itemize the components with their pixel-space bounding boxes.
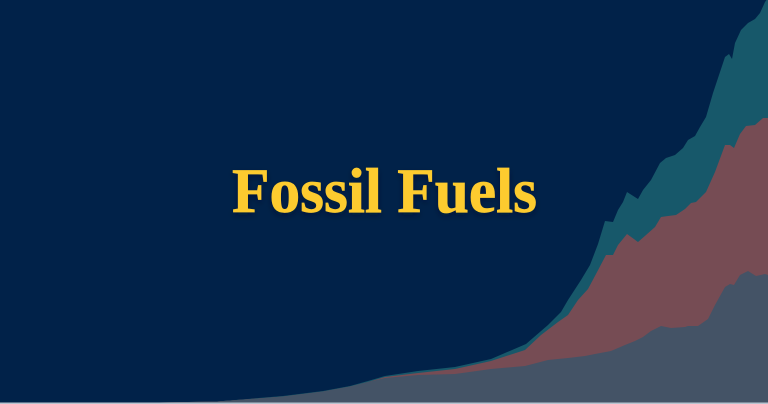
- title shadow: Fossil Fuels: [232, 159, 537, 229]
- title: Fossil Fuels: [232, 156, 537, 226]
- area: red middle band: [130, 118, 768, 404]
- bottom edge strip: [0, 402, 768, 404]
- area: slate bottom band: [130, 271, 768, 404]
